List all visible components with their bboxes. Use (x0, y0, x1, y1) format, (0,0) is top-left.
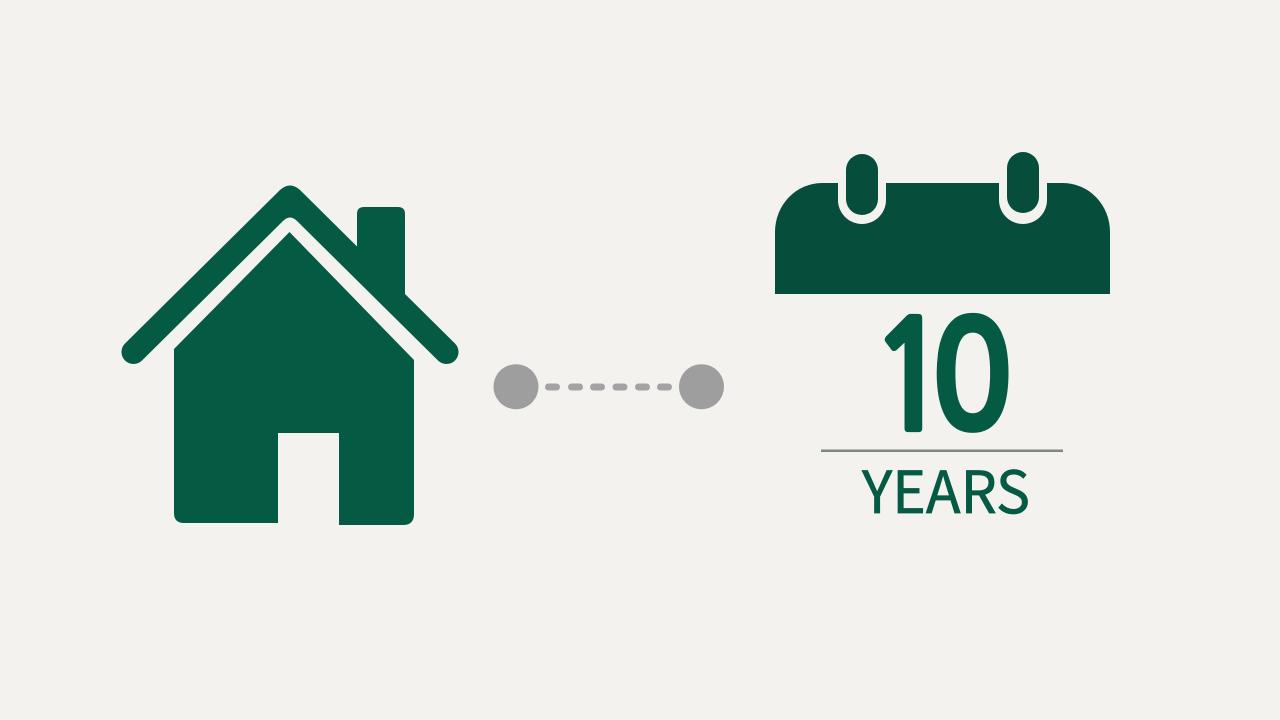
connector: dotted line between dots (494, 364, 724, 409)
calendar body (775, 183, 1110, 294)
house roof (121, 186, 459, 364)
icon: calendar (775, 146, 1110, 294)
label: years: YEARS (861, 446, 1030, 530)
number: 10: 10 (869, 302, 1014, 453)
icon: house (121, 186, 459, 525)
house chimney (357, 207, 405, 298)
house body with door (174, 232, 414, 525)
divider under number (821, 450, 1063, 452)
right binding ring (999, 146, 1047, 224)
left binding ring (838, 146, 886, 224)
